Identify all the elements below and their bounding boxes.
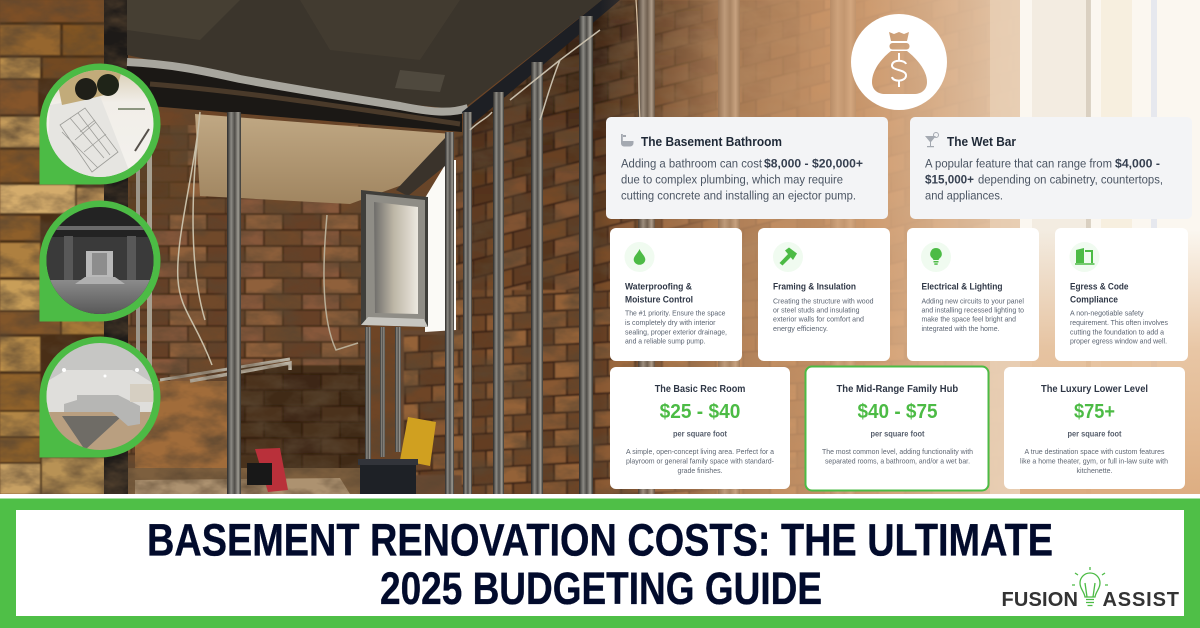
lit back ceiling bbox=[195, 114, 452, 204]
description: proper egress window and well. bbox=[1070, 337, 1167, 346]
photo bubble: blueprints bbox=[40, 63, 160, 184]
panel: egress bbox=[1055, 228, 1188, 361]
side window opening bbox=[425, 160, 456, 332]
description bbox=[625, 308, 727, 346]
description: kitchenette. bbox=[1076, 466, 1112, 475]
photo bubble: finished basement bbox=[40, 336, 160, 458]
heading: Egress & Code bbox=[1070, 282, 1128, 292]
pricing card: mid-range family hub bbox=[806, 366, 988, 490]
heading: Waterproofing & bbox=[625, 282, 692, 292]
body text: and appliances. bbox=[925, 188, 1003, 202]
unit: per square foot bbox=[673, 430, 727, 438]
body text: depending on cabinetry, countertops, bbox=[978, 172, 1163, 186]
heading: The Wet Bar bbox=[947, 135, 1016, 149]
panel: the basement bathroom bbox=[606, 117, 888, 219]
wall cables bbox=[470, 30, 600, 130]
panel: electrical bbox=[907, 228, 1039, 361]
description bbox=[1070, 308, 1168, 346]
yellow tool case bbox=[400, 417, 436, 466]
description bbox=[626, 447, 775, 475]
back brick wall bbox=[128, 125, 368, 495]
heading bbox=[625, 282, 693, 304]
description: A simple, open-concept living area. Perfect for a bbox=[626, 447, 774, 456]
description: energy efficiency. bbox=[773, 324, 828, 333]
icon: door bbox=[1070, 242, 1100, 272]
body text: A popular feature that can range from bbox=[925, 156, 1112, 170]
tier name: The Basic Rec Room bbox=[655, 384, 746, 395]
description: playroom or general family space with standard- bbox=[626, 456, 775, 465]
right brick wall bbox=[400, 0, 1030, 494]
body text: due to complex plumbing, which may require bbox=[621, 172, 843, 186]
description bbox=[822, 447, 973, 465]
description: sealing, proper exterior drainage, bbox=[625, 327, 727, 336]
body text: $15,000+ bbox=[925, 172, 974, 186]
body text: Adding a bathroom can cost bbox=[621, 156, 763, 170]
floor bbox=[128, 468, 368, 494]
photo: finished living room bbox=[46, 343, 154, 452]
icon: cocktail glass bbox=[925, 132, 938, 147]
pricing card: basic rec room bbox=[610, 367, 790, 489]
tier name: The Luxury Lower Level bbox=[1041, 384, 1148, 395]
title text: BASEMENT RENOVATION COSTS: THE ULTIMATE bbox=[147, 514, 1053, 566]
heading bbox=[1070, 282, 1128, 304]
work light bbox=[247, 448, 288, 492]
icon: hammer bbox=[773, 242, 803, 272]
price: $40 - $75 bbox=[858, 401, 938, 423]
description bbox=[773, 296, 874, 333]
logo: fusion assist: ASSIST bbox=[1102, 589, 1179, 611]
description: make the space feel bright and bbox=[922, 315, 1016, 324]
tier name: The Mid-Range Family Hub bbox=[836, 384, 958, 395]
bright right window area bbox=[1020, 0, 1200, 494]
unit: per square foot bbox=[870, 430, 925, 438]
icon: light bulb bbox=[921, 242, 951, 272]
dark corner column bbox=[104, 0, 128, 494]
pipes bbox=[160, 359, 290, 380]
title text bbox=[147, 514, 1053, 614]
plywood sheet bbox=[135, 381, 233, 468]
icon: money bag bbox=[851, 14, 947, 110]
description: A non-negotiable safety bbox=[1070, 308, 1144, 318]
description: A true destination space with custom features bbox=[1024, 447, 1165, 456]
dirt texture overlay bbox=[0, 0, 1020, 494]
description: exterior walls for comfort and bbox=[773, 315, 864, 324]
description: and a reliable sump pump. bbox=[625, 337, 706, 346]
lower window studs bbox=[365, 327, 371, 462]
body text: cutting concrete and installing an ejector pump. bbox=[621, 188, 856, 202]
pricing card: luxury lower level bbox=[1004, 367, 1185, 489]
steel beams and conduit bbox=[127, 60, 462, 132]
hanging cables bbox=[178, 112, 212, 365]
icon: bathtub bbox=[621, 134, 634, 146]
bubble frame bbox=[40, 63, 160, 184]
photo bubble: unfinished basement bbox=[40, 201, 160, 322]
heading: Electrical & Lighting bbox=[922, 282, 1002, 292]
unit: per square foot bbox=[1068, 430, 1122, 438]
photo: empty dark basement bbox=[46, 207, 154, 315]
panel: the wet bar bbox=[910, 117, 1192, 219]
bubble frame bbox=[40, 201, 160, 322]
price: $25 - $40 bbox=[660, 401, 740, 423]
black bucket bbox=[360, 464, 416, 494]
panel: framing bbox=[758, 228, 890, 361]
description: integrated with the home. bbox=[922, 324, 1000, 333]
bubble frame bbox=[40, 336, 160, 458]
body text: $4,000 - bbox=[1115, 156, 1160, 170]
background photo: unfinished basement bbox=[0, 0, 1200, 495]
description: separated rooms, a bathroom, and/or a wet bar. bbox=[825, 456, 970, 465]
logo: fusion assist bbox=[1002, 567, 1179, 611]
heading: The Basement Bathroom bbox=[641, 135, 782, 149]
description: grade finishes. bbox=[678, 466, 722, 475]
price: $75+ bbox=[1074, 401, 1115, 423]
open window bbox=[361, 190, 428, 327]
panel: waterproofing bbox=[610, 228, 742, 361]
description bbox=[1020, 447, 1168, 475]
body text bbox=[925, 156, 1163, 202]
icon: water drop bbox=[624, 242, 654, 272]
light wash toward the window bbox=[600, 0, 1025, 494]
description: The most common level, adding functionality with bbox=[822, 447, 973, 456]
description: Creating the structure with wood bbox=[773, 296, 874, 305]
description: or steel studs and insulating bbox=[773, 306, 860, 314]
heading: Framing & Insulation bbox=[773, 282, 856, 292]
description: is completely dry with interior bbox=[625, 318, 716, 327]
description bbox=[922, 296, 1024, 333]
description: Adding new circuits to your panel bbox=[922, 296, 1024, 305]
body text: $8,000 - $20,000+ bbox=[764, 156, 863, 170]
description: The #1 priority. Ensure the space bbox=[625, 308, 726, 318]
heading: Compliance bbox=[1070, 294, 1118, 304]
left brick wall bbox=[0, 0, 110, 494]
icon: logo light bulb bbox=[1072, 567, 1108, 606]
title text: 2025 BUDGETING GUIDE bbox=[380, 563, 822, 614]
description: like a home theater, gym, or full in-law suite with bbox=[1020, 456, 1168, 465]
dollar sign bbox=[892, 53, 906, 87]
title banner bbox=[0, 494, 1200, 628]
logo: fusion assist: FUSION bbox=[1002, 589, 1078, 611]
description: and installing recessed lighting to bbox=[922, 306, 1024, 314]
ceiling slab bbox=[127, 0, 602, 110]
photo: rolled blueprints bbox=[46, 70, 154, 178]
description: cutting the foundation to add a bbox=[1070, 327, 1165, 336]
description: requirement. This often involves bbox=[1070, 318, 1168, 327]
heading: Moisture Control bbox=[625, 294, 693, 304]
body text bbox=[621, 156, 863, 202]
steel studs bbox=[136, 0, 856, 494]
